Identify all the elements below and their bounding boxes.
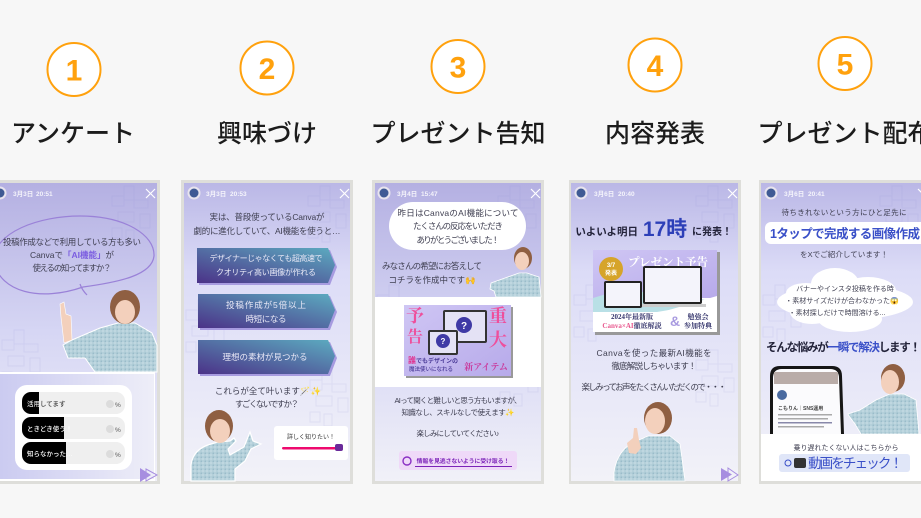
thanks bubble: ありがとうございました！ bbox=[416, 235, 500, 245]
present image: Canva×AI徹底解説 bbox=[602, 321, 662, 330]
step number 3: 3 bbox=[450, 52, 466, 84]
body text: AIって聞くと難しいと思う方もいますが、 bbox=[394, 395, 522, 405]
description text: 楽しみってお声をたくさんいただくので・・・ bbox=[582, 382, 726, 392]
poll card bbox=[15, 385, 132, 470]
benefit arrow 3 bbox=[198, 340, 337, 376]
link button: 情報を見逃さないように受け取る！ bbox=[417, 457, 509, 465]
announcement heading: に発表！ bbox=[692, 225, 732, 238]
intro text: 実は、普段使っているCanvaが bbox=[210, 212, 325, 222]
slider card bbox=[274, 426, 348, 460]
lead text: 待ちきれないという方にひと足先に bbox=[782, 207, 906, 217]
panel: story 2 interest: 20:53 bbox=[230, 191, 247, 198]
link button bbox=[399, 451, 517, 470]
panel: story 1 survey bbox=[0, 180, 160, 484]
teaser image: 魔法使いになれる bbox=[409, 365, 453, 373]
request text bbox=[382, 261, 482, 285]
speech bubble: Canvaで「AI機能」が bbox=[30, 250, 115, 260]
highlight box bbox=[765, 222, 921, 244]
video button: 動画をチェック！ bbox=[808, 456, 903, 471]
request text: コチラを作成中です🙌 bbox=[388, 275, 476, 285]
panel: story 3 present notice: 3月4日 bbox=[397, 190, 417, 198]
panel: story 3 present notice: 15:47 bbox=[421, 191, 438, 198]
request text: みなさんの希望にお答えして bbox=[382, 261, 482, 271]
step number 4 bbox=[628, 38, 682, 92]
person pointing up bbox=[60, 290, 157, 372]
step number 5 bbox=[818, 37, 872, 90]
present image: 2024年最新版 bbox=[611, 312, 653, 321]
cloud bubble: ・素材サイズだけが合わなかった😱 bbox=[785, 296, 899, 305]
teaser image: 予 bbox=[406, 306, 424, 326]
present image: & bbox=[670, 313, 680, 329]
benefit arrow 3: 理想の素材が見つかる bbox=[222, 352, 308, 362]
step number 2: 2 bbox=[259, 53, 275, 86]
benefit arrow 2: 時短になる bbox=[246, 314, 286, 324]
step number 2 bbox=[240, 42, 294, 94]
teaser image: ? bbox=[461, 321, 467, 332]
benefit arrow 1 bbox=[197, 248, 337, 285]
present image: プレゼント予告 bbox=[628, 255, 709, 269]
panel: story 4 announcement: 3月6日 bbox=[594, 190, 614, 198]
panel: story 2 interest bbox=[181, 180, 353, 484]
closing text bbox=[215, 386, 321, 409]
step number 4: 4 bbox=[647, 50, 664, 83]
next arrow bbox=[140, 468, 157, 482]
intro text bbox=[194, 212, 340, 236]
teaser image: 重 bbox=[489, 306, 507, 326]
heading: step 1: アンケート bbox=[11, 120, 135, 148]
step number 3 bbox=[432, 40, 484, 93]
present image: 3/7 bbox=[607, 263, 616, 269]
panel: story 5 distribution: 3月6日 bbox=[784, 190, 804, 198]
poll card: % bbox=[115, 402, 121, 409]
poll card: % bbox=[115, 452, 121, 459]
body text: 知識なし、スキルなしで使えます✨ bbox=[402, 407, 514, 417]
speech bubble: 使えるの知ってますか？ bbox=[32, 263, 112, 273]
heading: step 2: 興味づけ bbox=[217, 120, 317, 148]
highlight box: 1タップで完成する画像作成 bbox=[770, 226, 920, 241]
step number 1: 1 bbox=[66, 54, 82, 88]
panel: story 2 interest: 3月3日 bbox=[206, 190, 226, 198]
body text: 楽しみにしていてください♪ bbox=[416, 428, 500, 438]
step number 1 bbox=[48, 43, 100, 96]
person pointing right bbox=[191, 410, 261, 481]
thanks bubble: たくさんの反応をいただき bbox=[413, 221, 503, 231]
teaser image: 告 bbox=[407, 327, 423, 346]
step number 5: 5 bbox=[837, 48, 853, 82]
person gesturing bbox=[490, 247, 541, 297]
poll card: 知らなかった… bbox=[27, 449, 72, 458]
white band bbox=[375, 297, 541, 387]
panel: story 4 announcement bbox=[569, 180, 741, 484]
body text bbox=[394, 395, 522, 438]
teaser image: 誰でもデザインの bbox=[408, 355, 458, 365]
thanks bubble bbox=[389, 202, 526, 250]
announcement heading: 17時 bbox=[643, 218, 687, 241]
bottom band: 乗り遅れたくない人はこちらから bbox=[794, 443, 898, 452]
teaser image bbox=[404, 305, 513, 378]
phone mockup bbox=[770, 366, 844, 434]
heading: step 4: 内容発表 bbox=[605, 120, 705, 148]
benefit arrow 1: クオリティ高い画像が作れる bbox=[216, 267, 316, 277]
benefit arrow 2: 投稿作成が5倍以上 bbox=[226, 300, 306, 310]
cloud bubble: ・素材探しだけで時間溶ける... bbox=[789, 308, 885, 317]
panel: story 1 survey: 20:51 bbox=[36, 191, 53, 198]
phone mockup: こもりん｜SNS運用 bbox=[778, 405, 823, 412]
person gesturing bbox=[848, 364, 919, 434]
heading: step 3: プレゼント告知 bbox=[370, 120, 546, 148]
closing text: すごくないですか？ bbox=[235, 399, 299, 409]
description text: Canvaを使った最新AI機能を bbox=[596, 348, 712, 358]
teaser image: 大 bbox=[489, 330, 507, 350]
present image: 勉強会 bbox=[688, 312, 708, 321]
description text bbox=[582, 348, 726, 392]
present image bbox=[593, 250, 720, 335]
speech bubble bbox=[0, 216, 154, 295]
poll card: % bbox=[115, 427, 121, 434]
description text: 徹底解説しちゃいます！ bbox=[612, 361, 696, 371]
sub text: をXでご紹介しています！ bbox=[800, 249, 888, 259]
closing text: これらが全て叶います🪄✨ bbox=[215, 386, 321, 396]
present image: 参加特典 bbox=[684, 321, 713, 330]
panel: story 4 announcement: 20:40 bbox=[618, 191, 635, 198]
next arrow bbox=[721, 468, 738, 481]
teaser image: 新アイテム bbox=[464, 361, 508, 372]
poll card: ときどき使う！ bbox=[27, 424, 72, 433]
teaser image: ? bbox=[441, 337, 446, 346]
speech bubble: 投稿作成などで利用している方も多い bbox=[3, 237, 141, 247]
lower section bbox=[0, 372, 155, 481]
cloud bubble bbox=[777, 268, 913, 332]
present image: 発表 bbox=[605, 269, 617, 277]
panel: story 5 distribution: 20:41 bbox=[808, 191, 825, 198]
announcement heading bbox=[575, 218, 732, 241]
benefit arrow 1: デザイナーじゃなくても超高速で bbox=[210, 253, 322, 263]
panel: story 5 distribution bbox=[759, 180, 921, 484]
slider card: 詳しく知りたい！ bbox=[287, 433, 335, 441]
person pointing up bbox=[614, 402, 685, 481]
intro text: 劇的に進化していて、AI機能を使うと… bbox=[194, 226, 340, 236]
video button bbox=[779, 454, 910, 472]
panel: story 3 present notice bbox=[372, 180, 544, 484]
benefit arrow 2 bbox=[198, 294, 337, 330]
solve heading: そんな悩みが一瞬で解決します！ bbox=[766, 340, 921, 354]
panel: story 1 survey: 3月3日 bbox=[13, 190, 33, 198]
bottom band bbox=[761, 434, 921, 481]
announcement heading: いよいよ明日 bbox=[575, 226, 638, 238]
thanks bubble: 昨日はCanvaのAI機能について bbox=[398, 208, 518, 218]
poll card: 活用してます bbox=[27, 399, 66, 408]
cloud bubble: バナーやインスタ投稿を作る時 bbox=[796, 284, 894, 293]
